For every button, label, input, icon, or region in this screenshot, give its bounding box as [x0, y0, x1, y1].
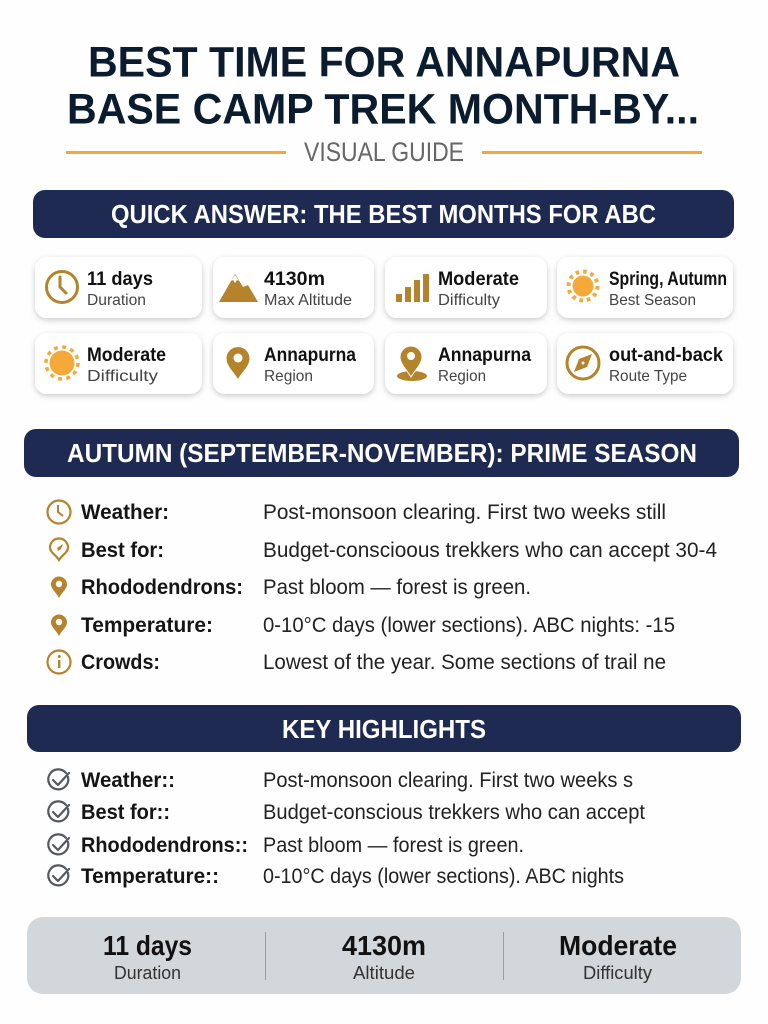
autumn row: weather: Post-monsoon clearing. First two weeks still	[263, 501, 666, 524]
stat: altitude	[342, 930, 426, 983]
autumn row: crowds: Crowds:	[81, 651, 160, 674]
banner: autumn prime season: AUTUMN (SEPTEMBER-NOVEMBER): PRIME SEASON	[67, 438, 697, 468]
icon: signal bars	[396, 274, 429, 302]
card: max altitude	[213, 257, 374, 318]
autumn row: temperature	[51, 614, 675, 637]
card: duration	[35, 257, 202, 318]
card: difficulty	[385, 257, 547, 318]
icon: compass	[567, 347, 599, 379]
icon: map pin on base	[397, 346, 427, 381]
icon: sun	[46, 347, 78, 379]
card: region with base: Annapurna	[438, 344, 531, 366]
highlight: rhododendrons: Past bloom — forest is green.	[263, 834, 524, 857]
stat: difficulty: Moderate	[559, 930, 677, 961]
card: max altitude: Max Altitude	[264, 292, 352, 309]
icon: map pin	[51, 614, 67, 636]
title	[67, 38, 699, 134]
highlight: best for: Budget-conscious trekkers who can accept	[263, 801, 645, 824]
highlight: temperature: Temperature::	[81, 865, 219, 888]
highlight: best for: Best for::	[81, 801, 170, 824]
banner: key highlights	[27, 705, 741, 752]
highlight: temperature: 0-10°C days (lower sections). ABC nights	[263, 865, 624, 888]
title: BEST TIME FOR ANNAPURNA	[88, 38, 680, 86]
stat: duration: 11 days	[103, 930, 192, 961]
autumn row: temperature: Temperature:	[81, 614, 213, 637]
stat: difficulty: Difficulty	[583, 963, 652, 983]
stat: difficulty	[559, 930, 677, 983]
banner: quick answer	[33, 190, 734, 238]
autumn row: rhododendrons	[51, 576, 531, 599]
card: difficulty: Difficulty	[438, 292, 500, 309]
card: route type: Route Type	[609, 368, 687, 385]
stats panel	[27, 917, 741, 994]
card: route type: out-and-back	[609, 344, 723, 366]
icon: info	[48, 650, 70, 674]
autumn row: weather: Weather:	[81, 501, 169, 524]
card: difficulty: Moderate	[438, 268, 519, 290]
card: route type	[557, 333, 733, 394]
highlight: weather: Post-monsoon clearing. First two weeks s	[263, 769, 633, 792]
card: best season	[557, 257, 733, 318]
icon: map pin	[226, 347, 250, 379]
highlight: best for	[48, 801, 645, 824]
highlight: weather: Weather::	[81, 769, 175, 792]
highlight: rhododendrons: Rhododendrons::	[81, 834, 248, 857]
stat: duration: Duration	[114, 963, 181, 983]
icon: clock	[48, 500, 70, 524]
card: moderate difficulty: Difficulty	[87, 368, 158, 385]
card: best season: Spring, Autumn	[609, 268, 727, 290]
banner: quick answer: QUICK ANSWER: THE BEST MONTHS FOR ABC	[111, 199, 656, 229]
stat: altitude: Altitude	[353, 963, 415, 983]
autumn row: weather	[48, 500, 666, 524]
icon: mountain	[219, 274, 258, 302]
card: region	[213, 333, 374, 394]
autumn row: crowds	[48, 650, 666, 674]
card: duration: 11 days	[87, 268, 153, 290]
icon: check	[48, 769, 69, 789]
banner: autumn prime season	[24, 429, 739, 477]
autumn row: temperature: 0-10°C days (lower sections). ABC nights: -15	[263, 614, 675, 637]
stat: duration	[103, 930, 192, 983]
autumn row: crowds: Lowest of the year. Some sections of trail ne	[263, 651, 666, 674]
autumn row: best for: Budget-conscioous trekkers who can accept 30-4	[263, 539, 717, 562]
card: region: Region	[264, 368, 313, 385]
card: region: Annapurna	[264, 344, 356, 366]
card: best season: Best Season	[609, 292, 696, 309]
autumn row: rhododendrons: Past bloom — forest is green.	[263, 576, 531, 599]
autumn row: best for: Best for:	[81, 539, 164, 562]
subtitle: visual guide	[66, 137, 702, 167]
card: region with base	[385, 333, 547, 394]
subtitle: visual guide: VISUAL GUIDE	[304, 137, 464, 167]
icon: check	[48, 801, 69, 821]
icon: check	[48, 865, 69, 885]
title: BASE CAMP TREK MONTH-BY...	[67, 86, 699, 134]
card: moderate difficulty	[35, 333, 202, 394]
card: max altitude: 4130m	[264, 268, 325, 290]
card: duration: Duration	[87, 292, 146, 309]
banner: key highlights: KEY HIGHLIGHTS	[282, 714, 486, 744]
highlight: weather	[48, 769, 633, 792]
autumn row: best for	[50, 538, 717, 562]
icon: outlined pin	[50, 538, 68, 560]
autumn row: rhododendrons: Rhododendrons:	[81, 576, 243, 599]
highlight: temperature	[48, 865, 624, 888]
icon: sun	[568, 272, 598, 300]
card: moderate difficulty: Moderate	[87, 344, 166, 366]
icon: clock	[46, 272, 78, 302]
icon: map pin	[51, 576, 67, 598]
icon: check	[48, 834, 69, 854]
stat: altitude: 4130m	[342, 930, 426, 961]
card: region with base: Region	[438, 368, 486, 385]
highlight: rhododendrons	[48, 834, 524, 857]
